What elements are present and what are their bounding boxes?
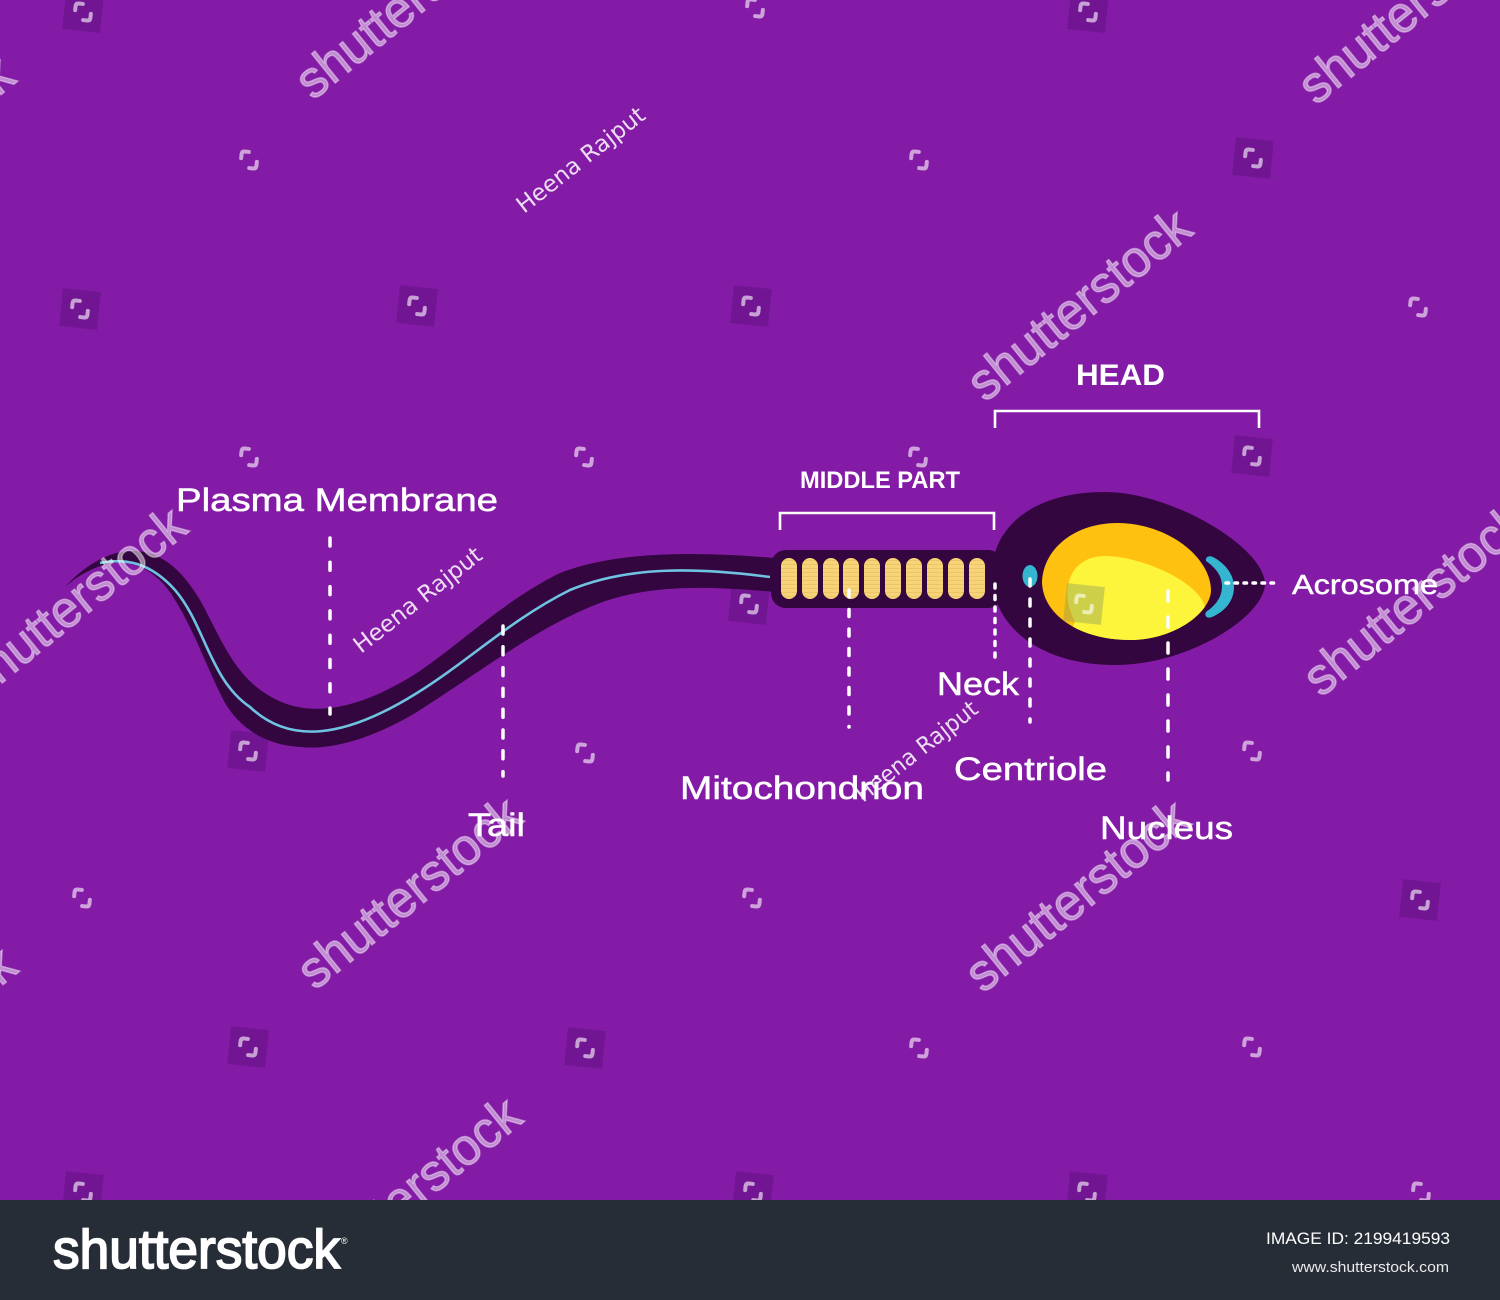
label line: tail — [501, 626, 505, 776]
footer logo: shutterstock — [53, 1218, 340, 1280]
heading: middle part: MIDDLE PART — [800, 467, 960, 494]
watermark: shutterstock text: shutterstock — [286, 1085, 533, 1300]
label line: neck — [993, 584, 997, 662]
label: plasma membrane: Plasma Membrane — [176, 482, 498, 518]
nucleus — [1042, 523, 1211, 640]
label line: nucleus — [1166, 591, 1170, 780]
label: mitochondrion: Mitochondrion — [680, 770, 924, 806]
label: acrosome: Acrosome — [1292, 569, 1438, 600]
image id: IMAGE ID: 2199419593 — [1266, 1230, 1450, 1248]
watermark: shutterstock text: shutterstock — [956, 197, 1203, 412]
watermark: contributor name: Heena Rajput — [851, 696, 983, 808]
label line: plasma membrane — [328, 538, 332, 714]
label: centriole: Centriole — [954, 751, 1107, 787]
watermark: contributor name: Heena Rajput — [349, 542, 488, 659]
acrosome — [1205, 556, 1234, 618]
bracket: middle part — [780, 513, 994, 530]
footer url: www.shutterstock.com — [1291, 1259, 1449, 1276]
label: tail: Tail — [468, 807, 525, 843]
middle piece — [771, 550, 1003, 608]
footer registered mark: ® — [341, 1236, 348, 1246]
watermark: shutterstock text: shutterstock — [286, 785, 533, 1000]
label: neck: Neck — [937, 666, 1020, 702]
label line: acrosome — [1226, 581, 1278, 585]
label line: mitochondrion — [847, 590, 851, 727]
heading: head: HEAD — [1076, 359, 1165, 392]
head — [994, 492, 1265, 665]
inset watermark logo on nucleus — [1063, 583, 1105, 625]
watermark: shutterstock text: shutterstock — [954, 788, 1201, 1003]
bracket: head — [995, 411, 1259, 428]
centriole — [1022, 565, 1038, 587]
watermark: contributor name — [349, 102, 983, 808]
mitochondria — [781, 558, 985, 599]
tail axial filament — [100, 561, 770, 732]
sperm tail body — [65, 551, 775, 748]
watermark: contributor name: Heena Rajput — [512, 102, 651, 219]
footer bar — [0, 1200, 1500, 1300]
label: nucleus: Nucleus — [1100, 810, 1233, 846]
label line: centriole — [1028, 579, 1032, 722]
